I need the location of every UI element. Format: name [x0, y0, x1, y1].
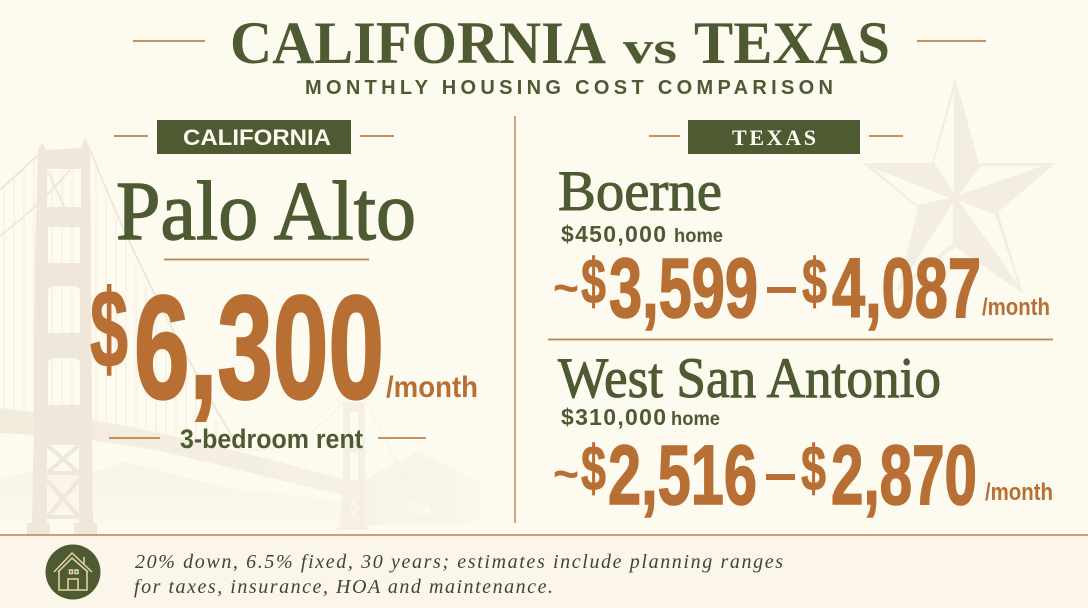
city: West San Antonio: home [671, 409, 720, 430]
price: Boerne range: ~ [553, 262, 579, 315]
icon: house [46, 544, 100, 600]
title [230, 10, 890, 76]
city: Boerne: $450,000 [561, 221, 666, 247]
price: $6,300 per month: 6,300 [134, 266, 384, 430]
panel: California [90, 120, 478, 454]
badge: California [157, 120, 351, 154]
price: Boerne range [553, 241, 1050, 335]
city: West San Antonio: $310,000 [561, 404, 666, 430]
title: vs [623, 22, 677, 73]
city: Boerne: Boerne [558, 160, 722, 223]
badge: California: CALIFORNIA [183, 125, 331, 150]
title: TEXAS [694, 10, 890, 76]
price: Boerne range: $ [802, 245, 827, 317]
caption: 3-bedroom rent: 3-bedroom rent [180, 424, 363, 454]
price: West San Antonio range [553, 428, 1053, 522]
price: $6,300 per month: $ [90, 268, 128, 391]
price: West San Antonio range: $ [581, 432, 606, 504]
price: West San Antonio range: 2,516 [608, 428, 757, 522]
title: CALIFORNIA [230, 10, 606, 76]
footnote [134, 551, 783, 598]
price: West San Antonio range: ~ [553, 448, 579, 501]
price: West San Antonio range: /month [985, 479, 1053, 506]
price: Boerne range: /month [982, 294, 1050, 321]
badge: Texas [688, 120, 860, 154]
footer [0, 535, 1088, 608]
price: $6,300 per month: /month [386, 371, 478, 404]
price: Boerne range: 4,087 [832, 241, 981, 335]
price: Boerne range: 3,599 [609, 241, 758, 335]
footnote: for taxes, insurance, HOA and maintenance. [134, 576, 553, 598]
illustration: Golden Gate Bridge watermark [0, 138, 497, 535]
footnote: 20% down, 6.5% fixed, 30 years; estimates include planning ranges [135, 551, 783, 573]
price: West San Antonio range: $ [801, 432, 826, 504]
panel: Texas [548, 120, 1053, 522]
city: West San Antonio: West San Antonio [558, 347, 941, 410]
badge: Texas: TEXAS [732, 125, 816, 150]
price: Boerne range: $ [581, 245, 606, 317]
city: Boerne: home [674, 226, 723, 247]
price: West San Antonio range: 2,870 [831, 428, 977, 522]
city: Palo Alto: Palo Alto [116, 165, 416, 258]
subtitle: MONTHLY HOUSING COST COMPARISON [305, 77, 833, 99]
illustration: Texas star watermark [862, 77, 1056, 293]
